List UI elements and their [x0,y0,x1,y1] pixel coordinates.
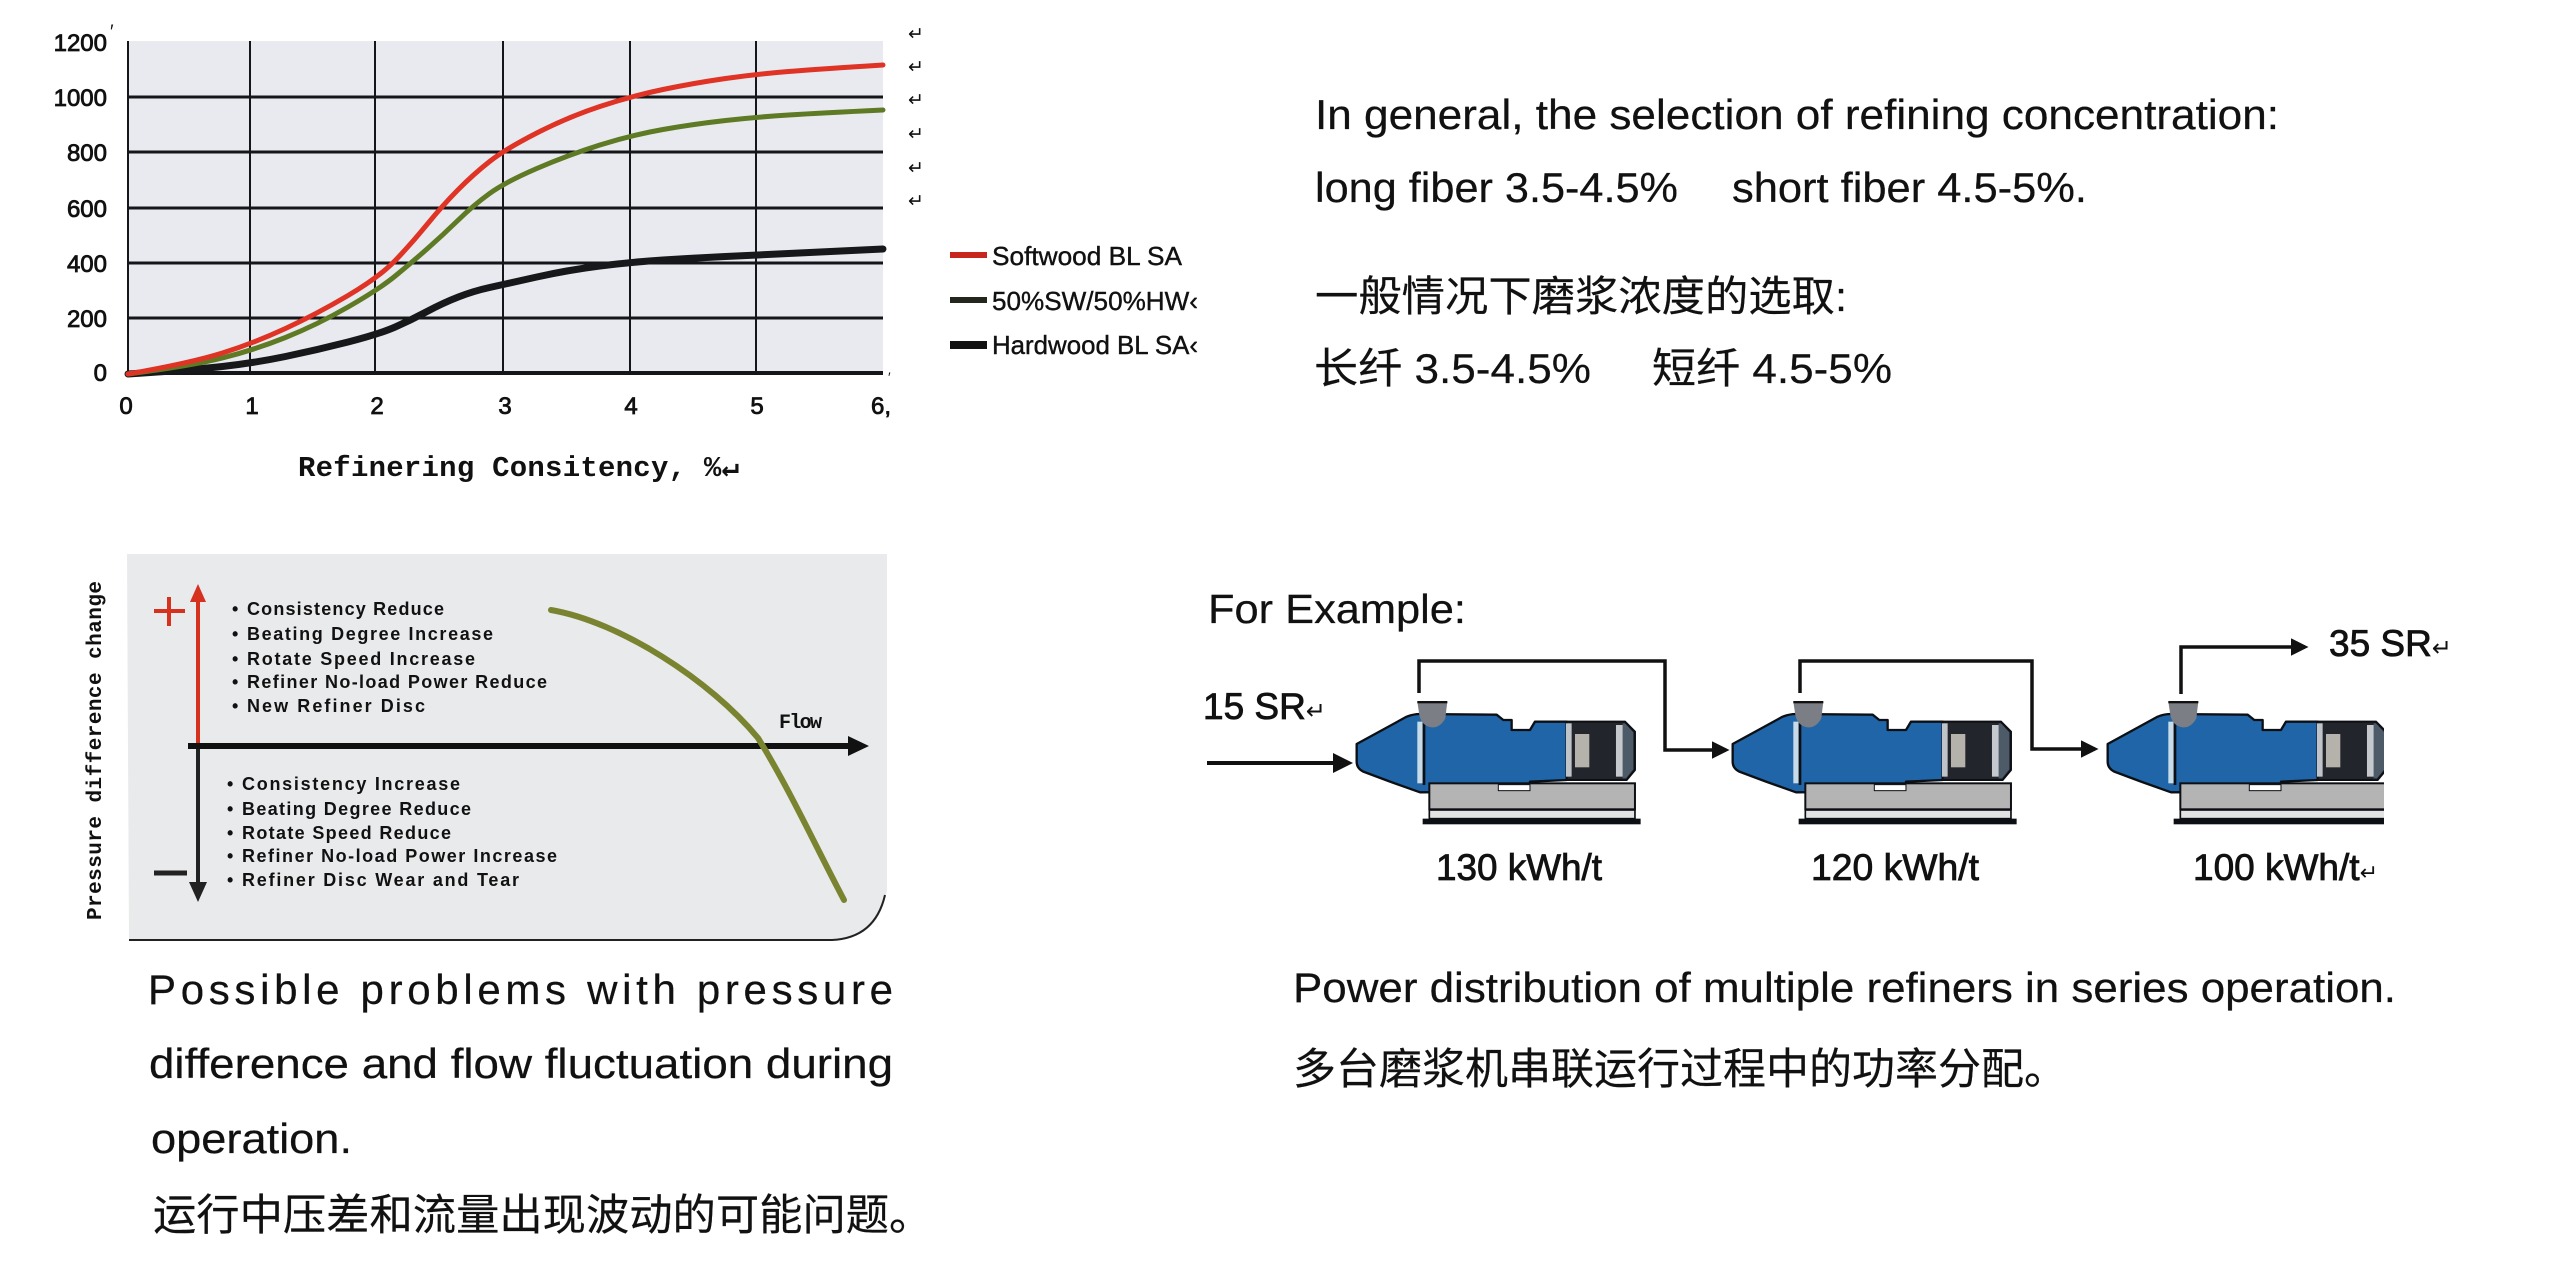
text block: refining concentration: 短纤 4.5-5% [1652,345,1892,392]
text block: refining concentration [1314,91,2279,392]
y axis labels: 1000 [54,85,107,112]
positive list: • [232,672,238,692]
return marks: ↵ [908,191,924,212]
negative list [227,774,557,890]
negative list: • [227,870,233,890]
return marks [908,24,924,212]
minus sign [154,870,187,876]
return marks: ↵ [908,158,924,179]
text block: refining concentration: short fiber 4.5-5%. [1732,164,2087,211]
negative list: Rotate Speed Reduce [242,823,451,843]
caption: pressure and flow problems: 运行中压差和流量出现波动的可能问题。 [153,1192,932,1240]
label: outlet freeness: 35 SR↵ [2329,623,2452,664]
label: refiner 1 power: 130 kWh/t [1436,847,1603,888]
legend: Hardwood BL SA‹ [992,330,1198,360]
x axis labels: 3 [498,393,512,420]
curve: softwood [128,65,883,374]
icon: refiner 1 [1357,701,1641,824]
y axis labels: 0 [94,360,107,387]
return marks: ↵ [908,57,924,78]
legend: 50%SW/50%HW‹ [992,286,1198,316]
positive list: • [232,624,238,644]
small stray marks: ′ [888,369,891,385]
negative list: • [227,774,233,794]
label: refiner 2 power: 120 kWh/t [1811,847,1980,888]
panel bottom edge [129,895,885,940]
positive list: Consistency Reduce [247,599,444,619]
chart: pressure difference vs flow [85,554,887,940]
y axis labels: 400 [67,251,107,278]
x axis labels: 4 [624,393,638,420]
caption: pressure and flow problems: Possible problems with pressure [148,966,893,1013]
chart grid lines [128,41,883,373]
curve: hardwood [128,249,883,374]
x axis labels: 2 [370,393,384,420]
arrow: refiner 1 to refiner 2 [1419,661,1726,750]
positive list: Refiner No-load Power Reduce [247,672,547,692]
arrow: refiner 2 to refiner 3 [1800,661,2095,749]
x axis labels: 6, [871,393,891,420]
caption: pressure and flow problems [148,966,932,1240]
negative list: Refiner No-load Power Increase [242,846,557,866]
plot background [128,41,883,373]
panel background [127,554,887,940]
x axis labels: 1 [245,393,259,420]
caption: power distribution: 多台磨浆机串联运行过程中的功率分配。 [1293,1046,2067,1094]
positive list: • [232,649,238,669]
text block: refining concentration: 长纤 3.5-4.5% [1314,345,1591,392]
caption: power distribution: Power distribution of multiple refiners in series operation. [1293,964,2396,1011]
caption: pressure and flow problems: difference and flow fluctuation during [149,1040,893,1087]
label: refiner 3 power: 100 kWh/t↵ [2193,847,2378,888]
negative list: • [227,846,233,866]
positive list: • [232,599,238,619]
curve: 50 percent softwood 50 percent hardwood [128,110,883,374]
caption: power distribution [1293,964,2396,1094]
heading: for example: For Example: [1208,586,1466,632]
negative arrow [189,746,207,902]
return marks: ↵ [908,90,924,111]
positive list: New Refiner Disc [247,696,425,716]
x axis title: Refinering Consitency, %↵ [298,452,739,485]
negative list: Beating Degree Reduce [242,799,471,819]
positive arrow [190,584,206,746]
flow label: Flow [779,712,822,735]
negative list: Consistency Increase [242,774,460,794]
positive list: • [232,696,238,716]
small stray marks: ′ [110,22,114,43]
y axis labels: 200 [67,306,107,333]
x axis labels: 5 [750,393,764,420]
negative list: • [227,799,233,819]
y axis labels: 600 [67,196,107,223]
text block: refining concentration: In general, the selection of refining concentration: [1315,91,2279,138]
return marks: ↵ [908,124,924,145]
legend: Softwood BL SA [992,241,1183,271]
arrow: inlet [1207,761,1349,765]
negative list: • [227,823,233,843]
label: inlet freeness: 15 SR↵ [1203,686,1326,727]
y axis label: Pressure difference change [85,581,108,920]
pressure curve [551,610,844,900]
line chart: refining power vs consistency [54,22,1198,485]
arrow: outlet [2181,647,2305,694]
negative list: Refiner Disc Wear and Tear [242,870,519,890]
small stray marks [110,22,891,385]
text block: refining concentration: 一般情况下磨浆浓度的选取: [1315,273,1847,320]
return marks: ↵ [908,24,924,45]
y axis labels [54,30,107,387]
text block: refining concentration: long fiber 3.5-4.5% [1315,164,1678,211]
icon: refiner 3 [2108,701,2392,824]
x axis labels [119,393,891,420]
icon: refiner 2 [1733,701,2017,824]
legend [950,241,1198,360]
y axis labels: 1200 [54,30,107,57]
diagram: refiners in series [1203,586,2452,888]
x axis labels: 0 [119,393,133,420]
y axis labels: 800 [67,140,107,167]
positive list: Beating Degree Increase [247,624,493,644]
flow axis arrow [188,736,869,756]
positive list [232,599,547,716]
positive list: Rotate Speed Increase [247,649,475,669]
plus sign [154,597,185,626]
caption: pressure and flow problems: operation. [151,1115,352,1162]
